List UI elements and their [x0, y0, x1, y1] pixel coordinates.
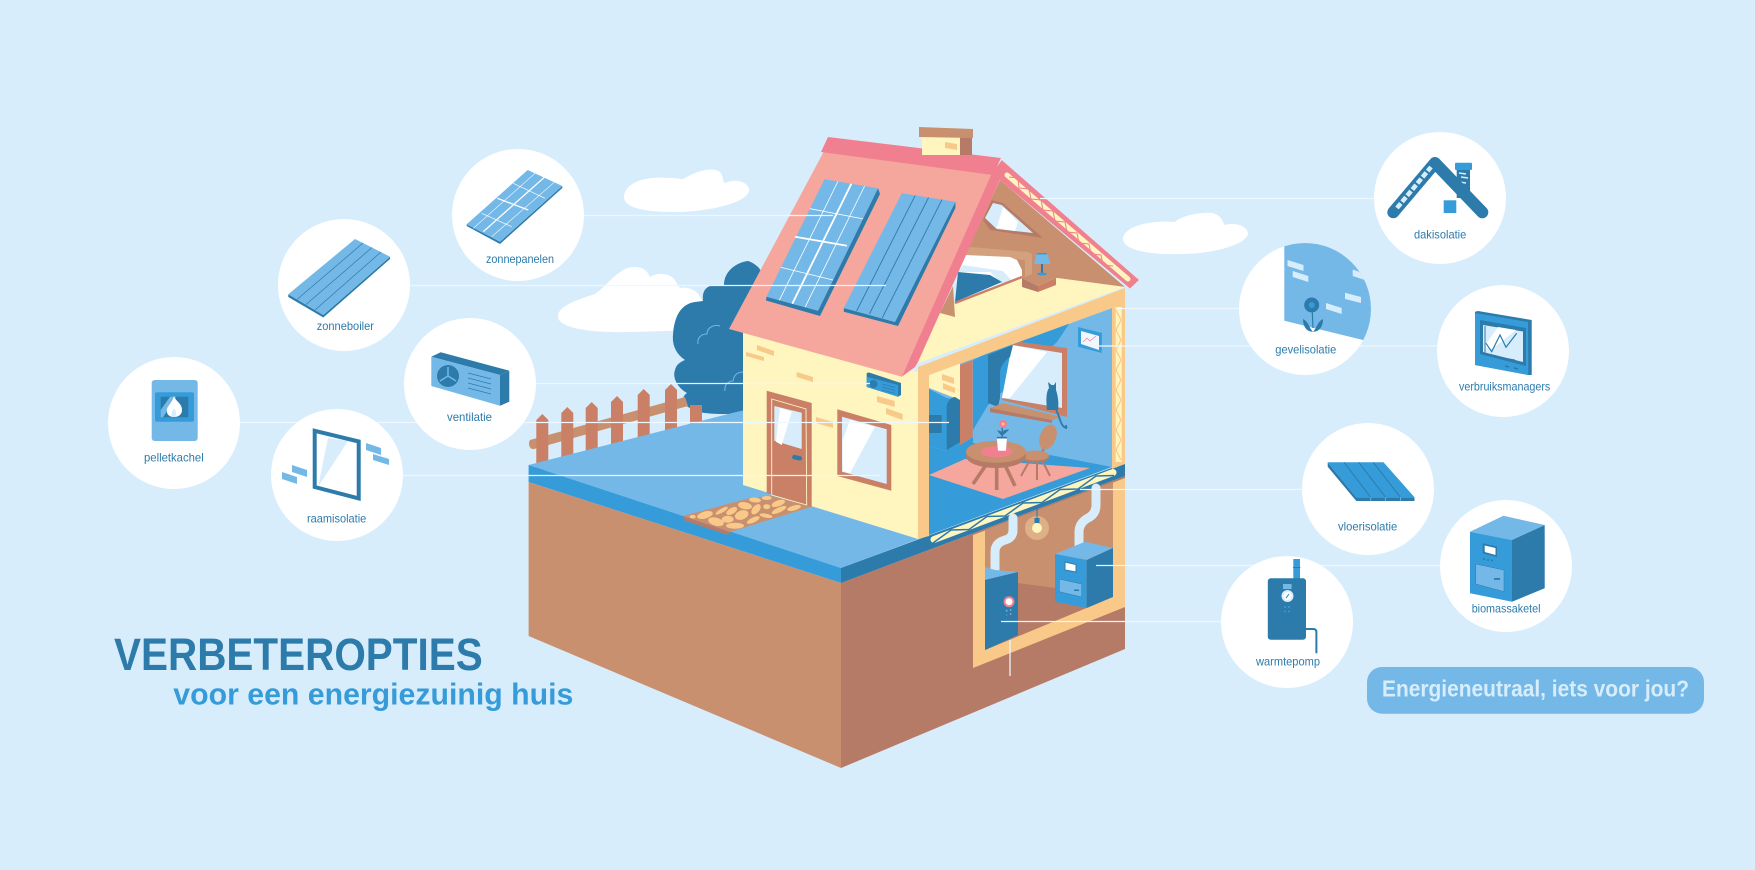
floor truss — [933, 472, 1114, 543]
title: VERBETEROPTIES — [114, 629, 483, 680]
icon: biomass boiler — [1470, 516, 1545, 602]
circle: ventilatie — [404, 318, 536, 450]
circle: warmtepomp: warmtepomp — [1255, 655, 1320, 669]
circle: gevelisolatie — [1239, 240, 1380, 375]
ground block — [529, 410, 1125, 768]
circle: dakisolatie — [1374, 132, 1506, 264]
circle: vloerisolatie — [1302, 423, 1434, 555]
circle: biomassaketel — [1440, 500, 1572, 632]
infographic canvas — [108, 127, 1704, 768]
fence — [529, 384, 702, 470]
button: energieneutraal — [1367, 667, 1704, 714]
circle: zonnepanelen: zonnepanelen — [486, 252, 554, 266]
circle: zonnepanelen — [452, 149, 584, 281]
wall monitor — [1078, 327, 1102, 353]
icon: pellet stove — [152, 380, 198, 441]
solar boiler on roof — [844, 193, 955, 326]
cream attic floor — [916, 278, 1125, 364]
door — [767, 391, 812, 507]
solar panels on roof — [766, 179, 880, 316]
room interior — [929, 308, 1112, 535]
circle: verbruiksmanagers — [1437, 285, 1569, 417]
bedside table with lamp — [1022, 253, 1056, 292]
floor — [929, 437, 1112, 535]
chair — [1021, 422, 1060, 480]
circle: warmtepomp — [1221, 556, 1353, 688]
roof — [729, 127, 1139, 377]
circle: ventilatie: ventilatie — [447, 410, 492, 424]
subtitle: voor een energiezuinig huis — [173, 676, 573, 711]
front window — [837, 409, 891, 491]
circle: vloerisolatie: vloerisolatie — [1338, 519, 1398, 533]
circle: verbruiksmanagers: verbruiksmanagers — [1459, 380, 1550, 394]
doorstep stones — [683, 496, 812, 535]
circle: zonneboiler — [278, 219, 410, 351]
icon: ventilation unit — [431, 352, 509, 406]
icon: energy monitor — [1475, 311, 1532, 375]
gable with truss — [1000, 160, 1139, 288]
front wall — [743, 330, 918, 539]
icon: insulated window — [282, 431, 389, 498]
orange wall frame with right truss — [918, 288, 1125, 539]
icon: floor insulation — [1328, 462, 1414, 501]
clouds — [558, 170, 1248, 332]
circle: raamisolatie: raamisolatie — [307, 512, 367, 526]
sofa — [929, 389, 960, 451]
window with view — [988, 342, 1067, 423]
button: energieneutraal: Energieneutraal, iets voor jou? — [1382, 676, 1689, 702]
basement — [973, 478, 1125, 668]
circle: zonneboiler: zonneboiler — [317, 319, 374, 333]
circle: pelletkachel: pelletkachel — [144, 451, 204, 465]
icon: facade insulation — [1284, 243, 1371, 340]
icon: roof insulation — [1393, 163, 1482, 213]
connector lines — [235, 198, 1446, 622]
chimney — [919, 127, 973, 155]
attic — [916, 180, 1125, 364]
circle: biomassaketel: biomassaketel — [1472, 602, 1540, 616]
heat pump unit — [985, 567, 1018, 650]
biomass boiler unit — [1055, 542, 1113, 608]
circle: gevelisolatie: gevelisolatie — [1275, 343, 1337, 357]
cat — [1046, 382, 1066, 428]
boiler pipes — [995, 488, 1096, 570]
table with vase — [966, 420, 1026, 490]
wall-mounted ventilation unit — [867, 372, 901, 397]
lamp — [1025, 508, 1049, 540]
circle: dakisolatie: dakisolatie — [1414, 228, 1467, 242]
tree — [673, 261, 780, 462]
icon: solar boiler — [288, 239, 390, 318]
icon: heat pump — [1268, 559, 1316, 653]
icon: solar panel — [467, 170, 562, 244]
circle: pelletkachel — [108, 357, 240, 489]
vertical pipe line under heat pump — [1009, 640, 1011, 676]
circle: raamisolatie — [271, 409, 403, 541]
